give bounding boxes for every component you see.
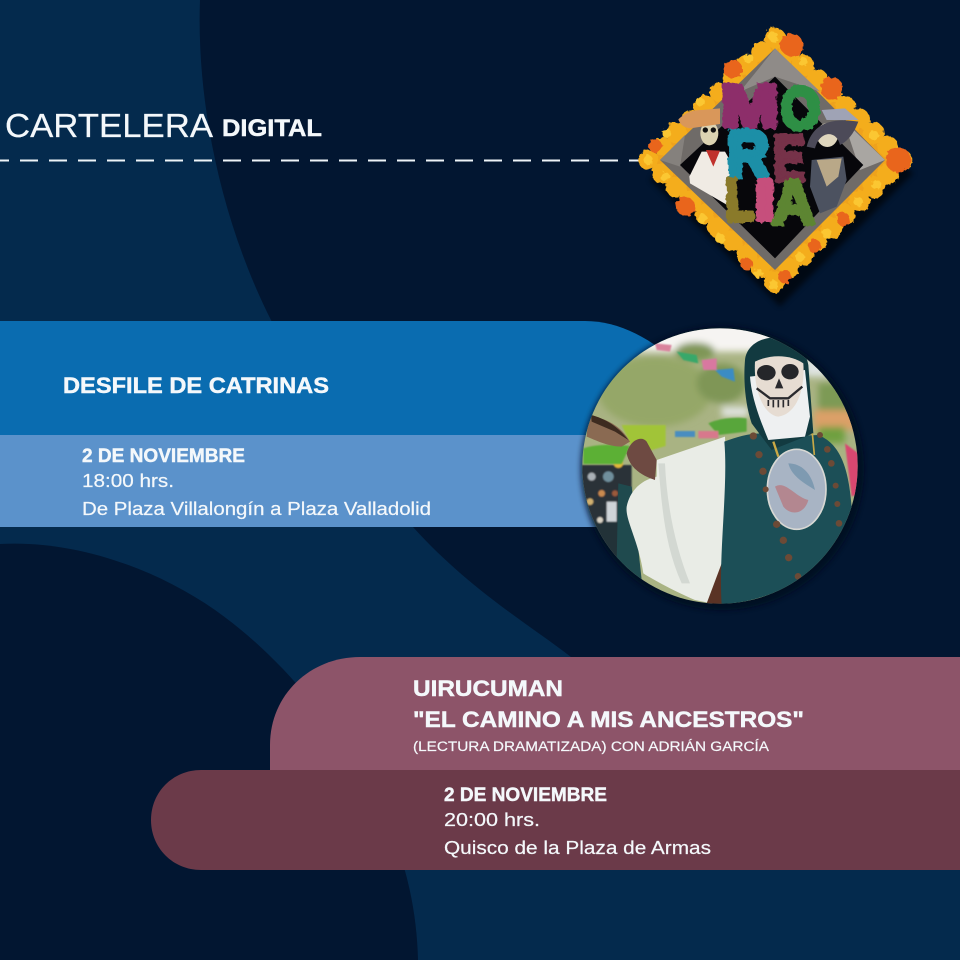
event title <box>413 676 804 732</box>
event time: 20:00 hrs. <box>444 810 540 830</box>
dashed divider <box>0 160 640 162</box>
letters: R <box>727 118 769 191</box>
crowd <box>582 461 633 566</box>
orange flowers <box>649 34 911 283</box>
hood <box>744 338 813 450</box>
logo shadow <box>650 43 913 307</box>
panel: Uirucuman <box>151 657 960 870</box>
event title: "EL CAMINO A MIS ANCESTROS" <box>413 707 804 732</box>
medallion <box>767 449 826 529</box>
event place: Quisco de la Plaza de Armas <box>444 838 711 858</box>
title: Cartelera Digital: DIGITAL <box>222 115 322 142</box>
white wimple <box>750 370 810 440</box>
title: Cartelera Digital: CARTELERA <box>5 107 213 144</box>
bushes and banners <box>583 343 858 497</box>
letters: I <box>755 170 774 233</box>
catrina skeleton <box>807 108 858 213</box>
panel: Desfile de Catrinas <box>0 321 662 527</box>
event date: 2 DE NOVIEMBRE <box>444 785 607 806</box>
letters: L <box>726 168 754 233</box>
detail band <box>0 435 610 527</box>
letters: M <box>722 74 778 139</box>
beads <box>750 432 842 580</box>
feather fan <box>587 417 630 447</box>
letters: E <box>773 122 805 195</box>
charro skeleton <box>678 108 732 207</box>
detail band <box>151 770 960 870</box>
white robe <box>627 437 728 603</box>
teal tunic <box>721 434 852 605</box>
event subtitle: (LECTURA DRAMATIZADA) CON ADRIÁN GARCÍA <box>413 739 769 754</box>
marigold border <box>638 28 912 292</box>
letters: A <box>772 168 815 238</box>
lighter petals <box>644 32 882 290</box>
heading band <box>270 657 960 770</box>
letters: O <box>781 76 820 141</box>
event title: DESFILE DE CATRINAS <box>63 373 329 398</box>
skull face <box>755 356 804 417</box>
hand <box>627 439 657 480</box>
logo: Morelia marigold diamond <box>638 28 913 307</box>
event time: 18:00 hrs. <box>82 471 174 491</box>
letters <box>722 74 820 238</box>
stone frame <box>660 48 885 270</box>
photo: catrina in costume <box>575 320 865 610</box>
heading band <box>0 321 662 435</box>
event title: UIRUCUMAN <box>413 676 563 701</box>
title: Cartelera Digital <box>5 107 322 144</box>
background <box>598 320 865 443</box>
event date: 2 DE NOVIEMBRE <box>82 446 245 467</box>
back figure <box>617 483 642 580</box>
event place: De Plaza Villalongín a Plaza Valladolid <box>82 499 431 519</box>
frame opening <box>680 77 863 258</box>
